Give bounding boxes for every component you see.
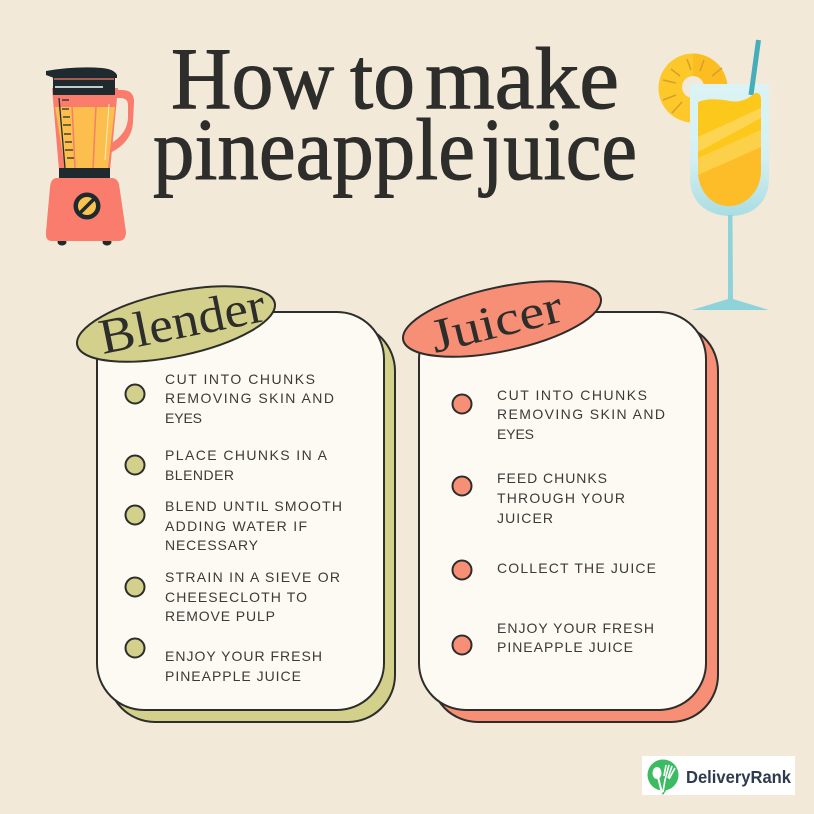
step text: REMOVING SKIN AND (165, 390, 334, 406)
step text: EYES (497, 426, 534, 442)
straw (751, 40, 758, 95)
pineapple slice (658, 54, 728, 122)
icon: blender (46, 67, 134, 246)
step text: BLEND UNTIL SMOOTH (165, 498, 342, 514)
panel: blender (71, 272, 395, 722)
card body (419, 312, 706, 710)
title: make (425, 31, 619, 128)
step text: PLACE CHUNKS IN A (165, 447, 328, 463)
step text: COLLECT THE JUICE (497, 560, 656, 576)
step text: EYES (165, 410, 202, 426)
step text (497, 387, 665, 655)
logo: DeliveryRank: DeliveryRank (686, 767, 791, 787)
step text: PINEAPPLE JUICE (497, 639, 633, 655)
icon: pineapple juice cocktail (658, 40, 769, 310)
step text: FEED CHUNKS (497, 470, 607, 486)
badge: Juicer (425, 280, 568, 364)
stem and foot (692, 215, 769, 310)
badge (71, 272, 281, 376)
step text: REMOVE PULP (165, 608, 275, 624)
badge (397, 267, 607, 371)
step text: BLENDER (165, 467, 234, 483)
title (153, 31, 637, 199)
step text: PINEAPPLE JUICE (165, 668, 301, 684)
step bullets (126, 384, 144, 658)
step bullets (452, 394, 472, 654)
glass (690, 84, 769, 216)
card body (97, 312, 384, 710)
step text: ENJOY YOUR FRESH (497, 620, 654, 636)
step text: THROUGH YOUR (497, 490, 625, 506)
card shadow (108, 324, 395, 722)
step text: NECESSARY (165, 537, 259, 553)
panel: juicer (397, 267, 718, 722)
step text: ADDING WATER IF (165, 518, 307, 534)
logo: DeliveryRank (642, 756, 795, 795)
step text: REMOVING SKIN AND (497, 406, 665, 422)
card shadow (431, 324, 718, 722)
title: How (171, 31, 334, 128)
step text (165, 371, 342, 684)
juice (698, 93, 761, 206)
step text: STRAIN IN A SIEVE OR (165, 569, 340, 585)
title: to (350, 31, 415, 128)
title: juice (478, 102, 637, 199)
title: pineapple (153, 102, 475, 199)
icon: spoon and fork (648, 760, 678, 795)
step text: ENJOY YOUR FRESH (165, 648, 322, 664)
step text: CUT INTO CHUNKS (165, 371, 315, 387)
step text: CHEESECLOTH TO (165, 589, 307, 605)
badge: Blender (94, 276, 270, 365)
step text: CUT INTO CHUNKS (497, 387, 647, 403)
step text: JUICER (497, 510, 553, 526)
